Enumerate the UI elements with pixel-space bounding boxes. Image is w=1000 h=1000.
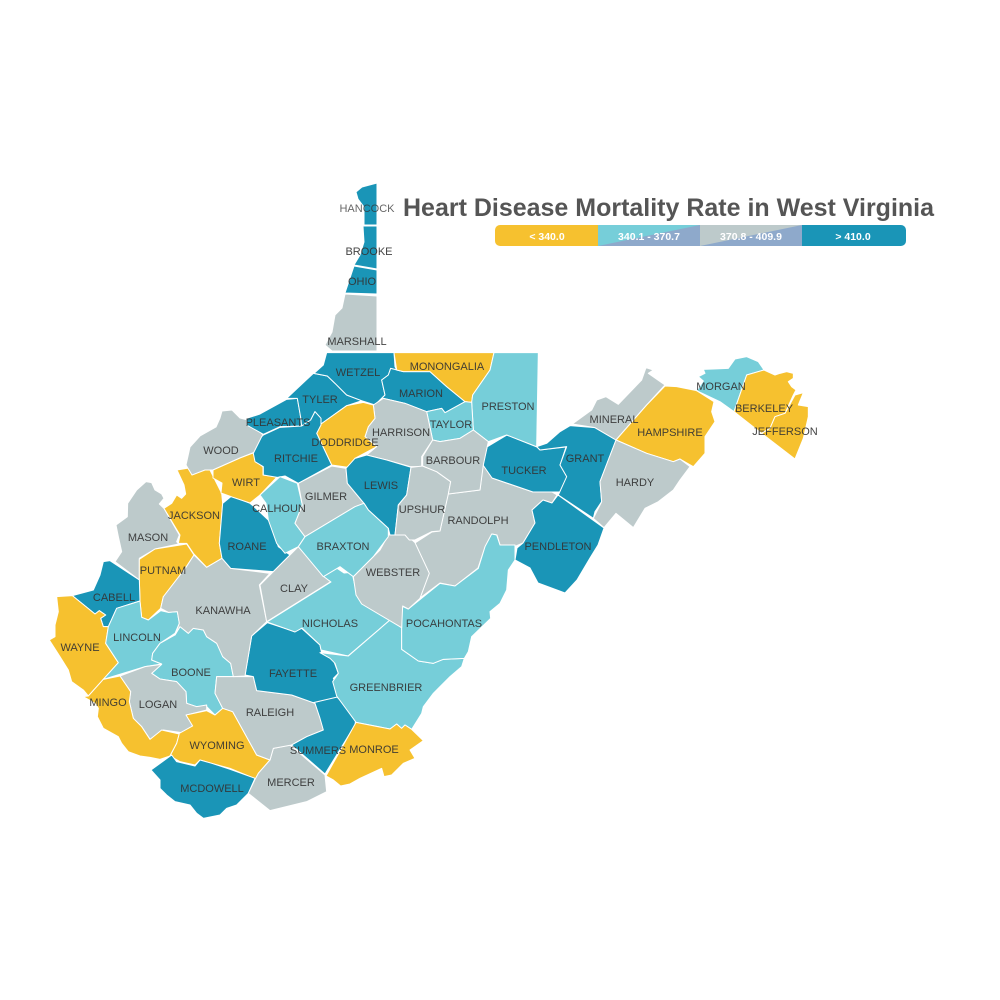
label: Hardy: HARDY <box>616 477 655 489</box>
county: Tucker <box>483 435 567 492</box>
label: Harrison: HARRISON <box>372 427 430 439</box>
county: Greenbrier <box>320 620 464 729</box>
county: Kanawha <box>161 555 270 677</box>
county: Wayne <box>49 596 118 696</box>
county: Webster <box>353 535 429 628</box>
label: Wyoming: WYOMING <box>190 740 244 752</box>
county: Grant <box>537 426 616 518</box>
label: Upshur: UPSHUR <box>399 504 445 516</box>
label: Jefferson: JEFFERSON <box>752 426 818 438</box>
label: Mineral: MINERAL <box>590 414 638 426</box>
label: Pendleton: PENDLETON <box>524 541 592 553</box>
legend <box>495 225 906 246</box>
county: Wood <box>186 410 263 475</box>
county: Randolph <box>415 465 557 598</box>
label: Fayette: FAYETTE <box>269 668 317 680</box>
label: Logan: LOGAN <box>139 699 177 711</box>
label: Nicholas: NICHOLAS <box>302 618 358 630</box>
legend item: below 340: < 340.0 <box>529 231 565 243</box>
label: Marion: MARION <box>399 388 443 400</box>
county: Morgan <box>697 357 764 412</box>
county: Taylor <box>427 402 473 442</box>
legend item: 370.8 to 409.9: 370.8 - 409.9 <box>720 231 782 243</box>
legend item: 340.1 to 370.7 <box>598 225 700 246</box>
label: Lewis: LEWIS <box>364 480 398 492</box>
county: Nicholas <box>267 567 390 656</box>
county: Ritchie <box>253 412 332 483</box>
county: Pocahontas <box>402 534 515 663</box>
label: Brooke: BROOKE <box>345 246 393 258</box>
county: Doddridge <box>317 402 377 467</box>
legend item: below 340 <box>495 225 598 246</box>
county: Marion <box>375 368 465 413</box>
title: Heart Disease Mortality Rate in West Virginia <box>403 194 935 222</box>
label: Doddridge: DODDRIDGE <box>311 437 379 449</box>
county: Marshall <box>325 294 377 351</box>
label: Wirt: WIRT <box>232 477 260 489</box>
label: Morgan: MORGAN <box>696 381 746 393</box>
county: Lincoln <box>103 601 179 679</box>
label: Wayne: WAYNE <box>60 642 100 654</box>
label: Calhoun: CALHOUN <box>252 503 306 515</box>
label: Kanawha: KANAWHA <box>195 605 251 617</box>
county: Mingo <box>83 676 179 759</box>
county: Boone <box>152 627 233 715</box>
label: Monroe: MONROE <box>349 744 399 756</box>
county: Lewis <box>346 455 411 535</box>
label: Grant: GRANT <box>566 453 605 465</box>
label: Tyler: TYLER <box>302 394 338 406</box>
county: Wyoming <box>170 708 270 779</box>
label: Pocahontas: POCAHONTAS <box>406 618 482 630</box>
region: northern panhandle <box>325 183 377 351</box>
legend item: above 410: > 410.0 <box>835 231 871 243</box>
county: Roane <box>219 496 290 572</box>
legend item: 340.1 to 370.7: 340.1 - 370.7 <box>618 231 680 243</box>
label: Roane: ROANE <box>227 541 267 553</box>
county: Braxton <box>298 503 388 577</box>
county: Ohio <box>345 266 377 294</box>
label: Ohio: OHIO <box>348 276 376 288</box>
county: Berkeley <box>734 370 796 433</box>
label: Braxton: BRAXTON <box>317 541 370 553</box>
legend item: 370.8 to 409.9 <box>700 225 802 246</box>
label: Tucker: TUCKER <box>501 465 547 477</box>
county: Mercer <box>248 745 327 811</box>
label: Marshall: MARSHALL <box>327 336 387 348</box>
county: Tyler <box>287 373 362 426</box>
label: Gilmer: GILMER <box>305 491 347 503</box>
label: Putnam: PUTNAM <box>140 565 186 577</box>
county: Jackson <box>164 467 223 567</box>
county: Preston <box>472 353 538 447</box>
label: Wood: WOOD <box>203 445 239 457</box>
county: Wetzel <box>314 353 397 405</box>
county: Pleasants <box>247 398 302 434</box>
label: Cabell: CABELL <box>93 592 135 604</box>
label: Lincoln: LINCOLN <box>113 632 161 644</box>
label: Hancock: HANCOCK <box>339 203 395 215</box>
region: north-central counties <box>247 353 538 577</box>
label: Wetzel: WETZEL <box>336 367 380 379</box>
label: Summers: SUMMERS <box>290 745 346 757</box>
county: Gilmer <box>295 466 364 537</box>
county: Monongalia <box>394 353 494 402</box>
county: Harrison <box>365 398 433 467</box>
county: Raleigh <box>215 677 323 760</box>
county: Hampshire <box>616 386 715 467</box>
label: Mercer: MERCER <box>267 777 315 789</box>
legend item: above 410 <box>802 225 906 246</box>
label: Mason: MASON <box>128 532 168 544</box>
county: Mineral <box>572 368 665 440</box>
label: Barbour: BARBOUR <box>426 455 480 467</box>
county: Hancock <box>356 183 377 225</box>
label: Mingo: MINGO <box>89 697 127 709</box>
county: Pendleton <box>515 495 604 593</box>
county: Brooke <box>354 226 377 269</box>
county: Fayette <box>245 623 342 703</box>
label: Berkeley: BERKELEY <box>735 403 794 415</box>
county: Calhoun <box>260 477 305 553</box>
label: Taylor: TAYLOR <box>430 419 472 431</box>
label: Webster: WEBSTER <box>366 567 420 579</box>
label: Preston: PRESTON <box>482 401 535 413</box>
county: Clay <box>260 547 331 622</box>
county: Putnam <box>139 544 194 620</box>
label: Hampshire: HAMPSHIRE <box>637 427 703 439</box>
map: West Virginia choropleth <box>49 183 808 818</box>
county: Jefferson <box>762 393 808 459</box>
county: Monroe <box>326 722 423 786</box>
label: McDowell: MCDOWELL <box>180 783 244 795</box>
label: Jackson: JACKSON <box>168 510 220 522</box>
county: McDowell <box>151 755 255 818</box>
county labels <box>60 203 818 795</box>
label: Monongalia: MONONGALIA <box>410 361 485 373</box>
county: Hardy <box>593 440 690 528</box>
region: eastern panhandle <box>537 357 808 528</box>
county: Logan <box>120 664 207 739</box>
county: Mason <box>115 482 179 580</box>
label: Boone: BOONE <box>171 667 211 679</box>
county: Barbour <box>423 430 488 494</box>
label: Clay: CLAY <box>280 583 309 595</box>
label: Ritchie: RITCHIE <box>274 453 318 465</box>
county: Wirt <box>213 453 277 503</box>
region: southwestern counties <box>49 467 356 818</box>
county: Upshur <box>395 466 451 540</box>
region: southeastern counties <box>320 534 515 786</box>
label: Greenbrier: GREENBRIER <box>350 682 422 694</box>
label: Raleigh: RALEIGH <box>246 707 294 719</box>
county: Cabell <box>72 561 140 627</box>
label: Pleasants: PLEASANTS <box>246 417 310 429</box>
county: Summers <box>292 697 356 774</box>
label: Randolph: RANDOLPH <box>447 515 509 527</box>
